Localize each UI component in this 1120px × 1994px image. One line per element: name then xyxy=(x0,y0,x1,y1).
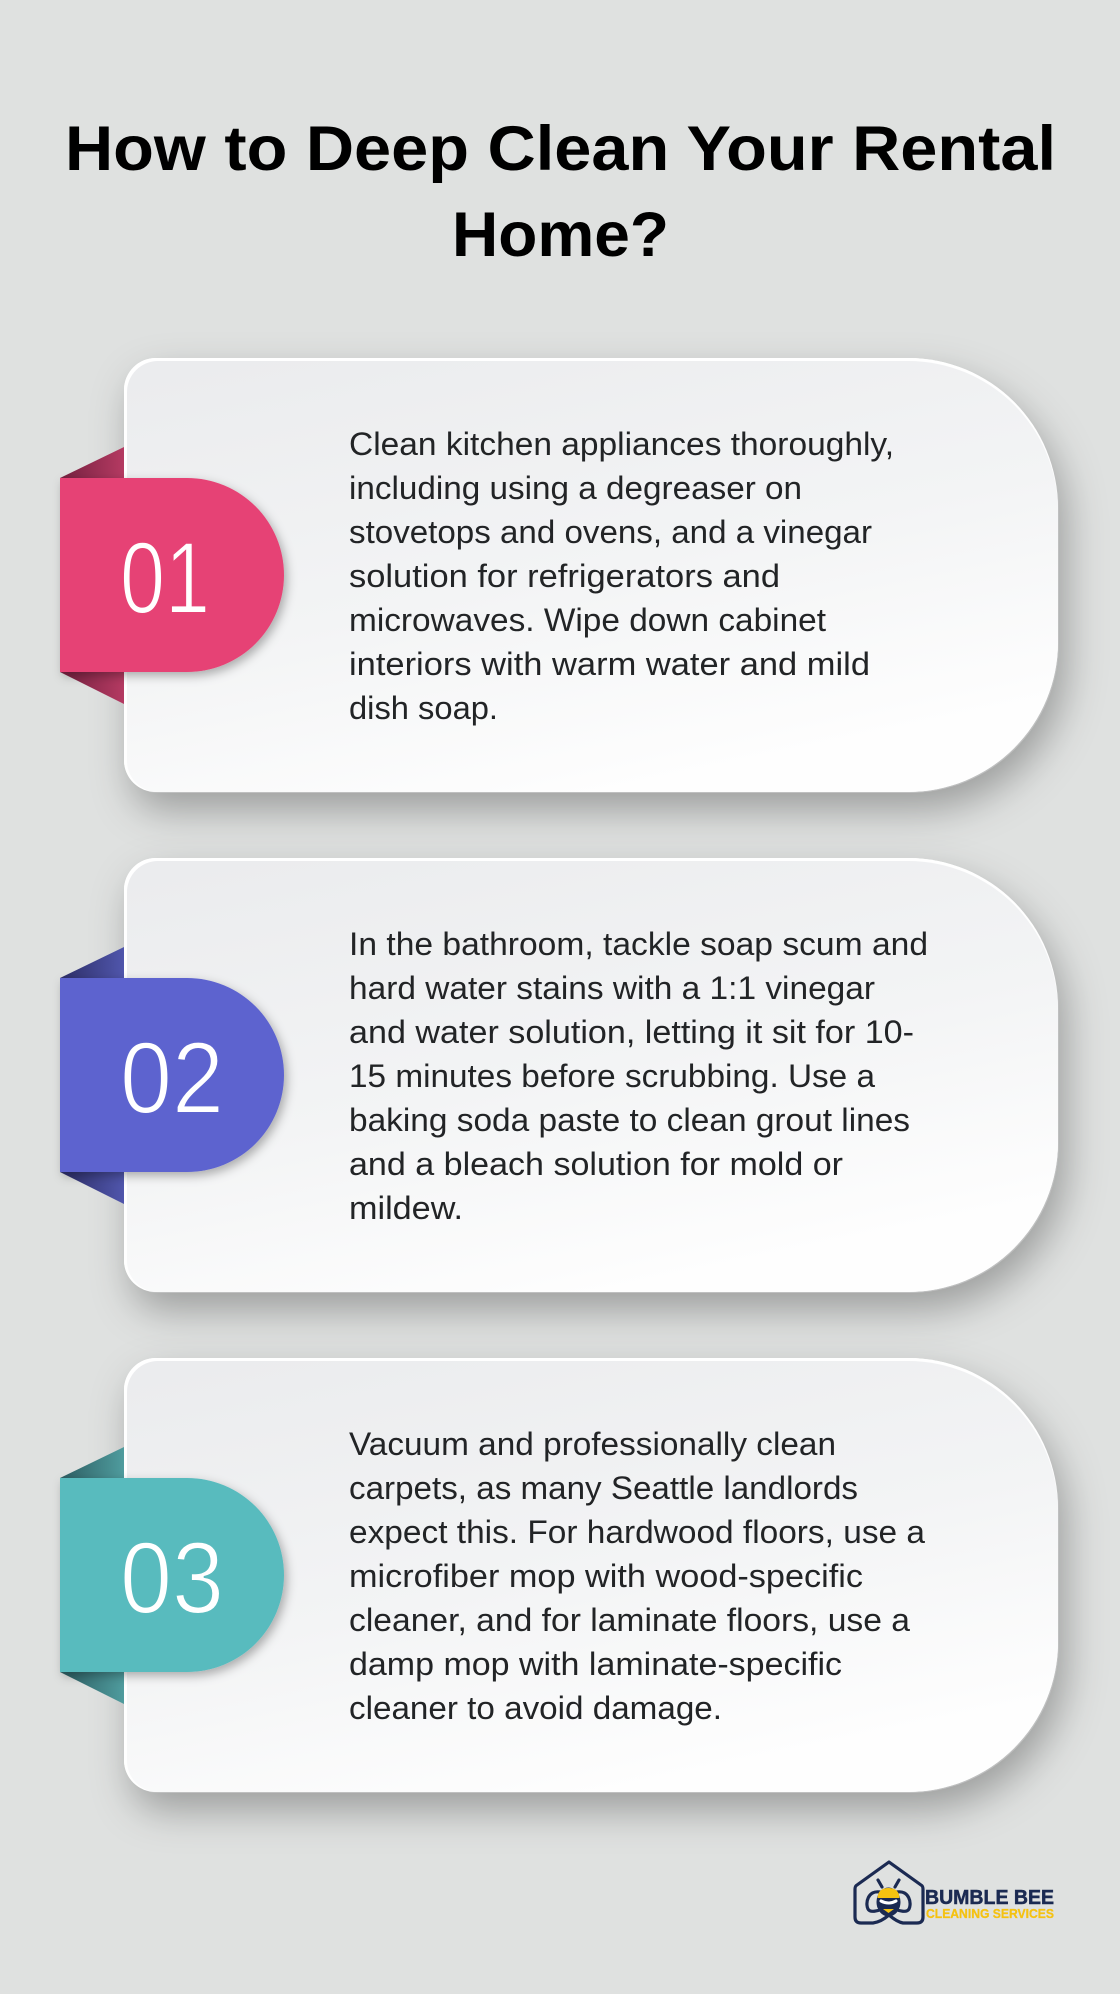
body text: microfiber mop with wood-specific xyxy=(349,1558,863,1594)
body text: hard water stains with a 1:1 vinegar xyxy=(349,970,875,1006)
body text xyxy=(349,926,928,1226)
body text: In the bathroom, tackle soap scum and xyxy=(349,926,928,962)
body text xyxy=(349,426,894,726)
body text: and water solution, letting it sit for 10- xyxy=(349,1014,914,1050)
body text: and a bleach solution for mold or xyxy=(349,1146,843,1182)
body text: solution for refrigerators and xyxy=(349,558,780,594)
ribbon folds xyxy=(60,1447,124,1704)
card background xyxy=(124,1358,1059,1793)
panel: step 2 xyxy=(60,858,1059,1293)
body text: dish soap. xyxy=(349,690,498,726)
panel: step 1 xyxy=(60,358,1059,793)
body text: Clean kitchen appliances thoroughly, xyxy=(349,426,894,462)
body text: 15 minutes before scrubbing. Use a xyxy=(349,1058,875,1094)
number badge 03: 03 xyxy=(120,1521,224,1635)
number badge 03 xyxy=(60,1478,284,1672)
body text: cleaner to avoid damage. xyxy=(349,1690,722,1726)
body text: microwaves. Wipe down cabinet xyxy=(349,602,826,638)
number badge 02: 02 xyxy=(120,1021,224,1135)
logo: Bumble Bee Cleaning Services xyxy=(855,1862,1054,1923)
panel: step 3 xyxy=(60,1358,1059,1793)
number badge 02 xyxy=(60,978,284,1172)
body text: cleaner, and for laminate floors, use a xyxy=(349,1602,910,1638)
title xyxy=(65,114,1056,270)
card background xyxy=(124,858,1059,1293)
title: Home? xyxy=(452,200,669,270)
body text: Vacuum and professionally clean xyxy=(349,1426,836,1462)
logo wordmark xyxy=(925,1887,1054,1921)
body text xyxy=(349,1426,925,1726)
body text: baking soda paste to clean grout lines xyxy=(349,1102,910,1138)
icon: house with bee xyxy=(855,1862,923,1923)
body text: stovetops and ovens, and a vinegar xyxy=(349,514,872,550)
logo wordmark: BUMBLE BEE xyxy=(925,1887,1054,1909)
body text: carpets, as many Seattle landlords xyxy=(349,1470,858,1506)
logo wordmark: CLEANING SERVICES xyxy=(926,1906,1054,1921)
card background xyxy=(124,358,1059,793)
ribbon folds xyxy=(60,447,124,704)
number badge 01 xyxy=(60,478,284,672)
body text: mildew. xyxy=(349,1190,463,1226)
ribbon folds xyxy=(60,947,124,1204)
body text: damp mop with laminate-specific xyxy=(349,1646,842,1682)
title: How to Deep Clean Your Rental xyxy=(65,114,1056,184)
body text: expect this. For hardwood floors, use a xyxy=(349,1514,925,1550)
number badge 01: 01 xyxy=(120,521,210,635)
body text: interiors with warm water and mild xyxy=(349,646,870,682)
body text: including using a degreaser on xyxy=(349,470,802,506)
